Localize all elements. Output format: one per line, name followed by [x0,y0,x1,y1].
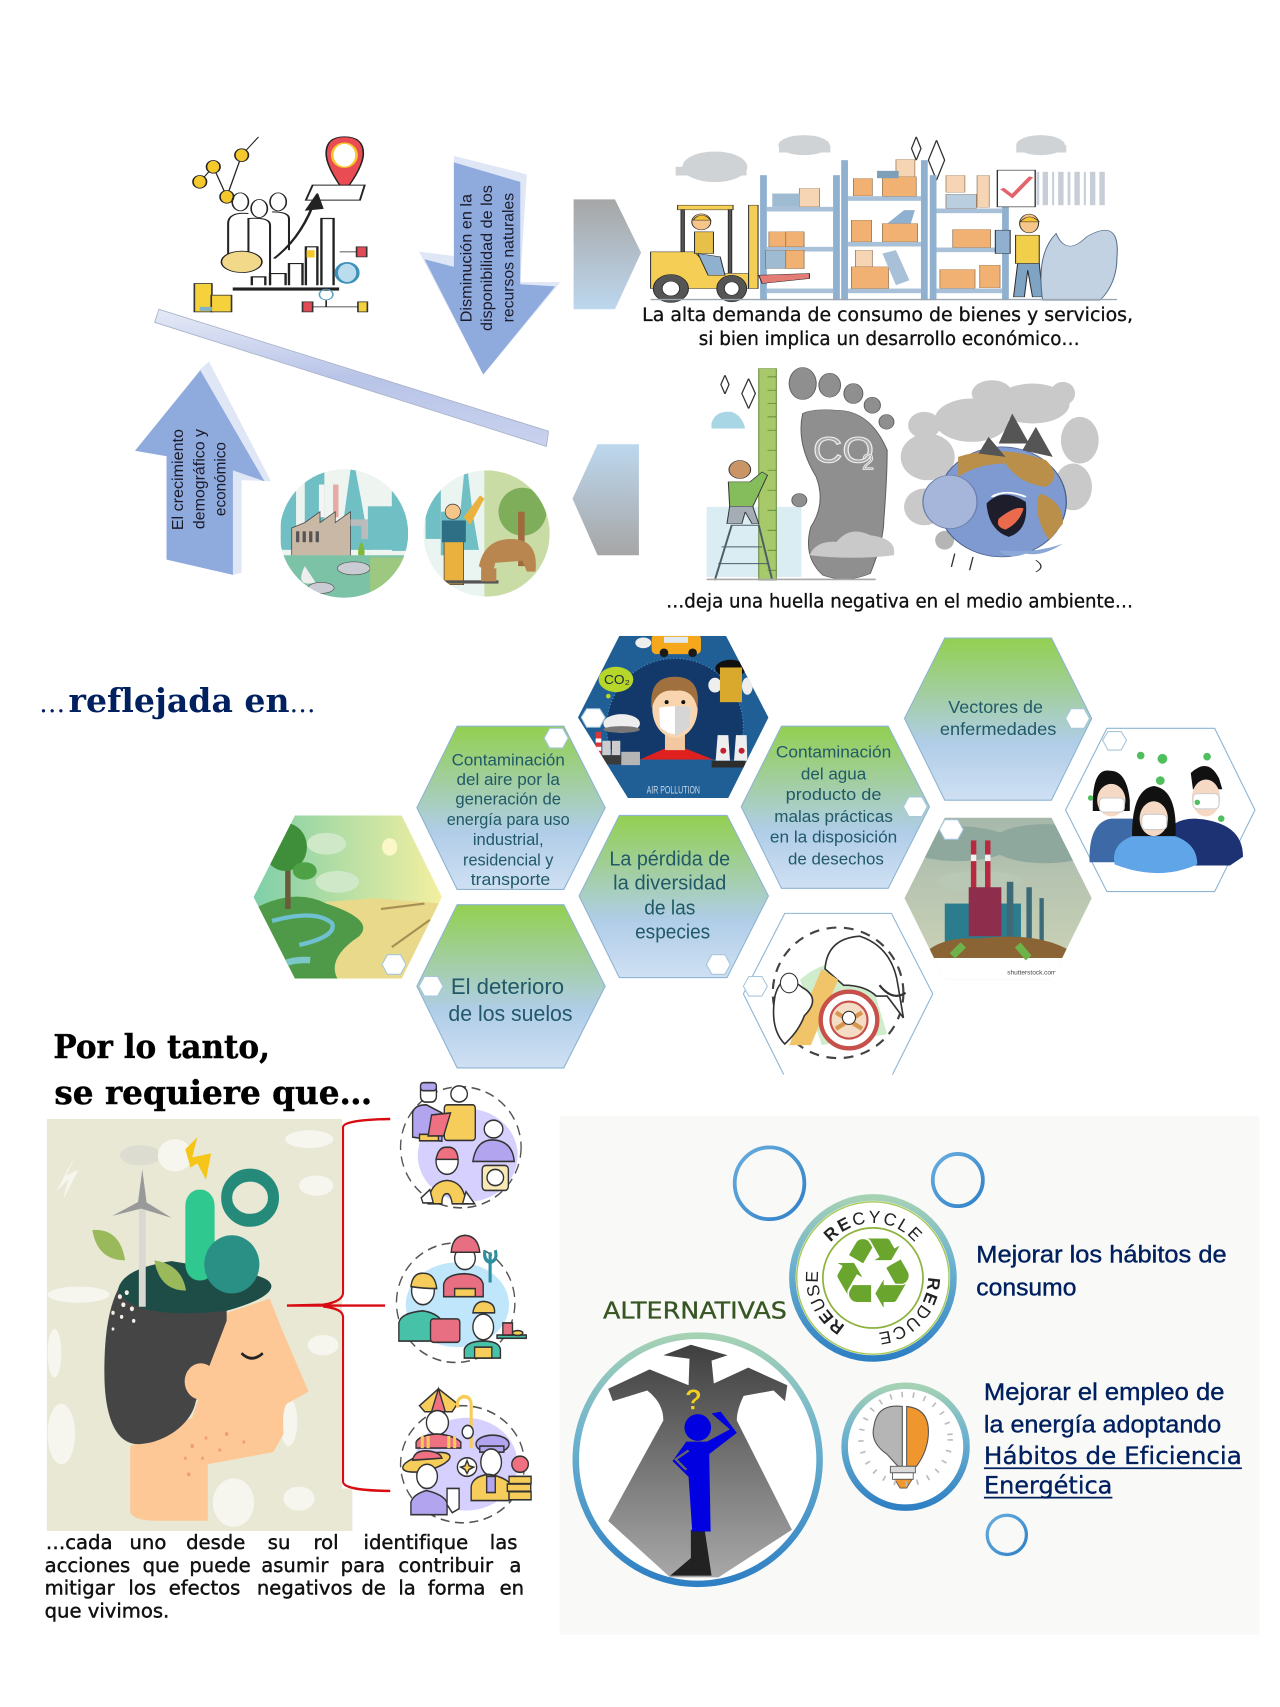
icon: recycle circle: REDUCE [879,1278,940,1344]
arrow: crecimiento [135,362,271,575]
hexagon: contaminación del agua: producto de [786,785,881,804]
hexagon: deterioro de los suelos [417,905,605,1068]
text block: cada uno desde su rol: que vivimos. [45,1600,169,1623]
CO2 subscript: 2 [862,449,874,474]
hexagon: air pollution image [577,633,773,800]
badge [743,976,767,996]
arrow: pentagon right [574,199,641,309]
hexagon: pérdida de diversidad: especies [635,920,710,943]
badge [544,728,568,748]
text block: cada uno desde su rol: desde [186,1531,245,1554]
red bracket [287,1119,390,1491]
icon: recycle circle: RECYCLE [823,1210,922,1242]
text: hábitos de eficiencia energética: Energética [984,1471,1112,1499]
arrow label: económico [212,442,229,516]
icon: recycle circle: REUSE [806,1272,844,1335]
label: alternativas: ALTERNATIVAS [603,1298,787,1324]
hexagon: pérdida de diversidad [579,815,768,978]
arrow: disminución [419,156,561,375]
text block: cada uno desde su rol: efectos [169,1577,240,1600]
hexagon: contaminación del aire [417,726,605,889]
text block: cada uno desde su rol: asumir [261,1554,329,1577]
text block: cada uno desde su rol: los [128,1577,156,1600]
badge [939,820,963,839]
icon: crossroads with person: ? [685,1384,702,1416]
text block: cada uno desde su rol [45,1531,524,1623]
hexagon: factory image [903,818,1099,981]
hexagon: air pollution image: CO₂ [604,673,630,687]
text block: cada uno desde su rol: puede [189,1554,251,1577]
text block: cada uno desde su rol: su [268,1531,290,1554]
badge [1066,709,1090,728]
text block: cada uno desde su rol: para [341,1554,385,1577]
text block: cada uno desde su rol: mitigar [45,1577,116,1600]
arrow label: El crecimiento [170,429,187,530]
hexagon: air pollution image: AIR POLLUTION [647,784,700,796]
hexagon: factory image: shutterstock.com [1007,969,1056,976]
hexagon: contaminación del agua: Contaminación [776,743,891,762]
badge [706,955,730,974]
text: mejorar empleo de la energía: la energía adoptando [984,1412,1221,1439]
arrow label: Disminución en la [458,193,475,322]
hexagon: contaminación del aire: Contaminación [452,751,565,769]
hexagon: animals image [743,913,933,1077]
caption: alta demanda: La alta demanda de consumo de bienes y servicios, [642,305,1133,326]
hexagon: contaminación del agua: en la disposición [770,828,897,847]
icon: workers [396,1235,526,1362]
text block: cada uno desde su rol: contribuir [398,1554,494,1577]
smoke [901,380,1099,550]
badge [903,797,927,816]
panel: alternativas [572,1146,1242,1588]
hexagon: pérdida de diversidad: la diversidad [613,871,726,894]
text block: cada uno desde su rol: acciones [45,1554,130,1577]
hexagon: contaminación del aire: industrial, [473,831,544,849]
hexagon: contaminación del agua: de desechos [788,849,884,868]
text block: cada uno desde su rol: las [490,1531,517,1554]
text: mejorar hábitos de consumo: consumo [976,1274,1076,1301]
heading: por lo tanto: se requiere que… [54,1073,372,1112]
text: mejorar empleo de la energía: Mejorar el empleo de [984,1379,1224,1406]
hexagon: contaminación del agua: malas prácticas [774,807,893,826]
hexagon: contaminación del aire: del aire por la [457,771,561,789]
arrow: pentagon left [573,444,639,555]
text block: cada uno desde su rol: identifique [364,1531,468,1554]
image: head with green ideas [47,1119,352,1531]
text block: cada uno desde su rol: que [143,1554,179,1577]
illustration: footprint and sick earth [707,368,1099,580]
arrow label: disponibilidad de los [479,185,496,331]
hexagon: vectores de enfermedades: Vectores de [948,697,1043,717]
hexagon: masked people image [1066,728,1255,892]
text block: cada uno desde su rol: a [509,1554,521,1577]
icon: deforestation [424,470,550,596]
earth [938,447,1066,557]
decorative ring 2 [933,1154,983,1206]
icon: consumers [401,1083,521,1208]
hexagon: contaminación del aire: generación de [455,791,561,809]
warehouse illustration [651,135,1117,303]
heading: reflejada en: … [39,689,65,719]
arrow label: demográfico y [192,429,209,529]
decorative ring 1 [735,1147,804,1219]
hexagon: vectores de enfermedades [904,638,1092,800]
CO2 label on footprint: CO [813,430,874,471]
arrow label: recursos naturales [501,192,518,322]
text: mejorar hábitos de consumo: Mejorar los hábitos de [976,1242,1227,1269]
badge [581,709,605,727]
text block: cada uno desde su rol: en [500,1577,524,1600]
hexagon: pérdida de diversidad: de las [644,896,695,919]
climber [715,461,772,580]
badge [382,955,406,974]
caption: alta demanda: si bien implica un desarrollo económico… [699,329,1080,350]
hexagon: contaminación del aire: residencial y [463,851,554,869]
hexagon: deterioro de los suelos: El deterioro [451,974,564,999]
text block: cada uno desde su rol: …cada [46,1531,112,1554]
text block: cada uno desde su rol: la [398,1577,416,1600]
hexagon: landscape image [254,815,444,979]
heading: reflejada en: reflejada en [69,681,290,720]
icon: community roles [401,1389,531,1523]
text block: cada uno desde su rol: rol [313,1531,339,1554]
hexagon: pérdida de diversidad: La pérdida de [609,847,730,870]
icon: recycle circle: ♻ [829,1217,917,1331]
icon: economic growth [193,137,367,312]
worker [995,214,1043,297]
text block: cada uno desde su rol: negativos [257,1577,353,1600]
text block: cada uno desde su rol: uno [130,1531,166,1554]
forklift [651,205,809,303]
icon: brain lightbulb [845,1386,967,1508]
icon: crossroads with person [576,1336,820,1584]
text: hábitos de eficiencia energética: Hábitos de Eficiencia [984,1442,1242,1470]
caption: huella negativa: …deja una huella negativa en el medio ambiente… [666,592,1133,613]
decorative ring 3 [987,1515,1026,1554]
heading: por lo tanto: Por lo tanto, [53,1027,270,1066]
hexagon: deterioro de los suelos: de los suelos [448,1001,573,1026]
badge [1103,732,1127,750]
hexagon: contaminación del agua: del agua [801,764,867,783]
text block: cada uno desde su rol: de [361,1577,386,1600]
heading: reflejada en: … [290,689,316,719]
icon: polluted city [280,470,408,598]
text block: cada uno desde su rol: forma [428,1577,485,1600]
hexagon: vectores de enfermedades: enfermedades [940,719,1057,739]
icon: recycle circle [789,1194,957,1362]
text: hábitos de eficiencia energética [984,1442,1250,1500]
footprint [789,368,894,579]
hexagon: contaminación del aire: energía para uso [447,811,570,829]
badge [419,976,443,996]
hexagon: contaminación del agua [741,726,930,888]
diagonal bar [155,309,549,446]
hexagon: contaminación del aire: transporte [471,871,550,889]
